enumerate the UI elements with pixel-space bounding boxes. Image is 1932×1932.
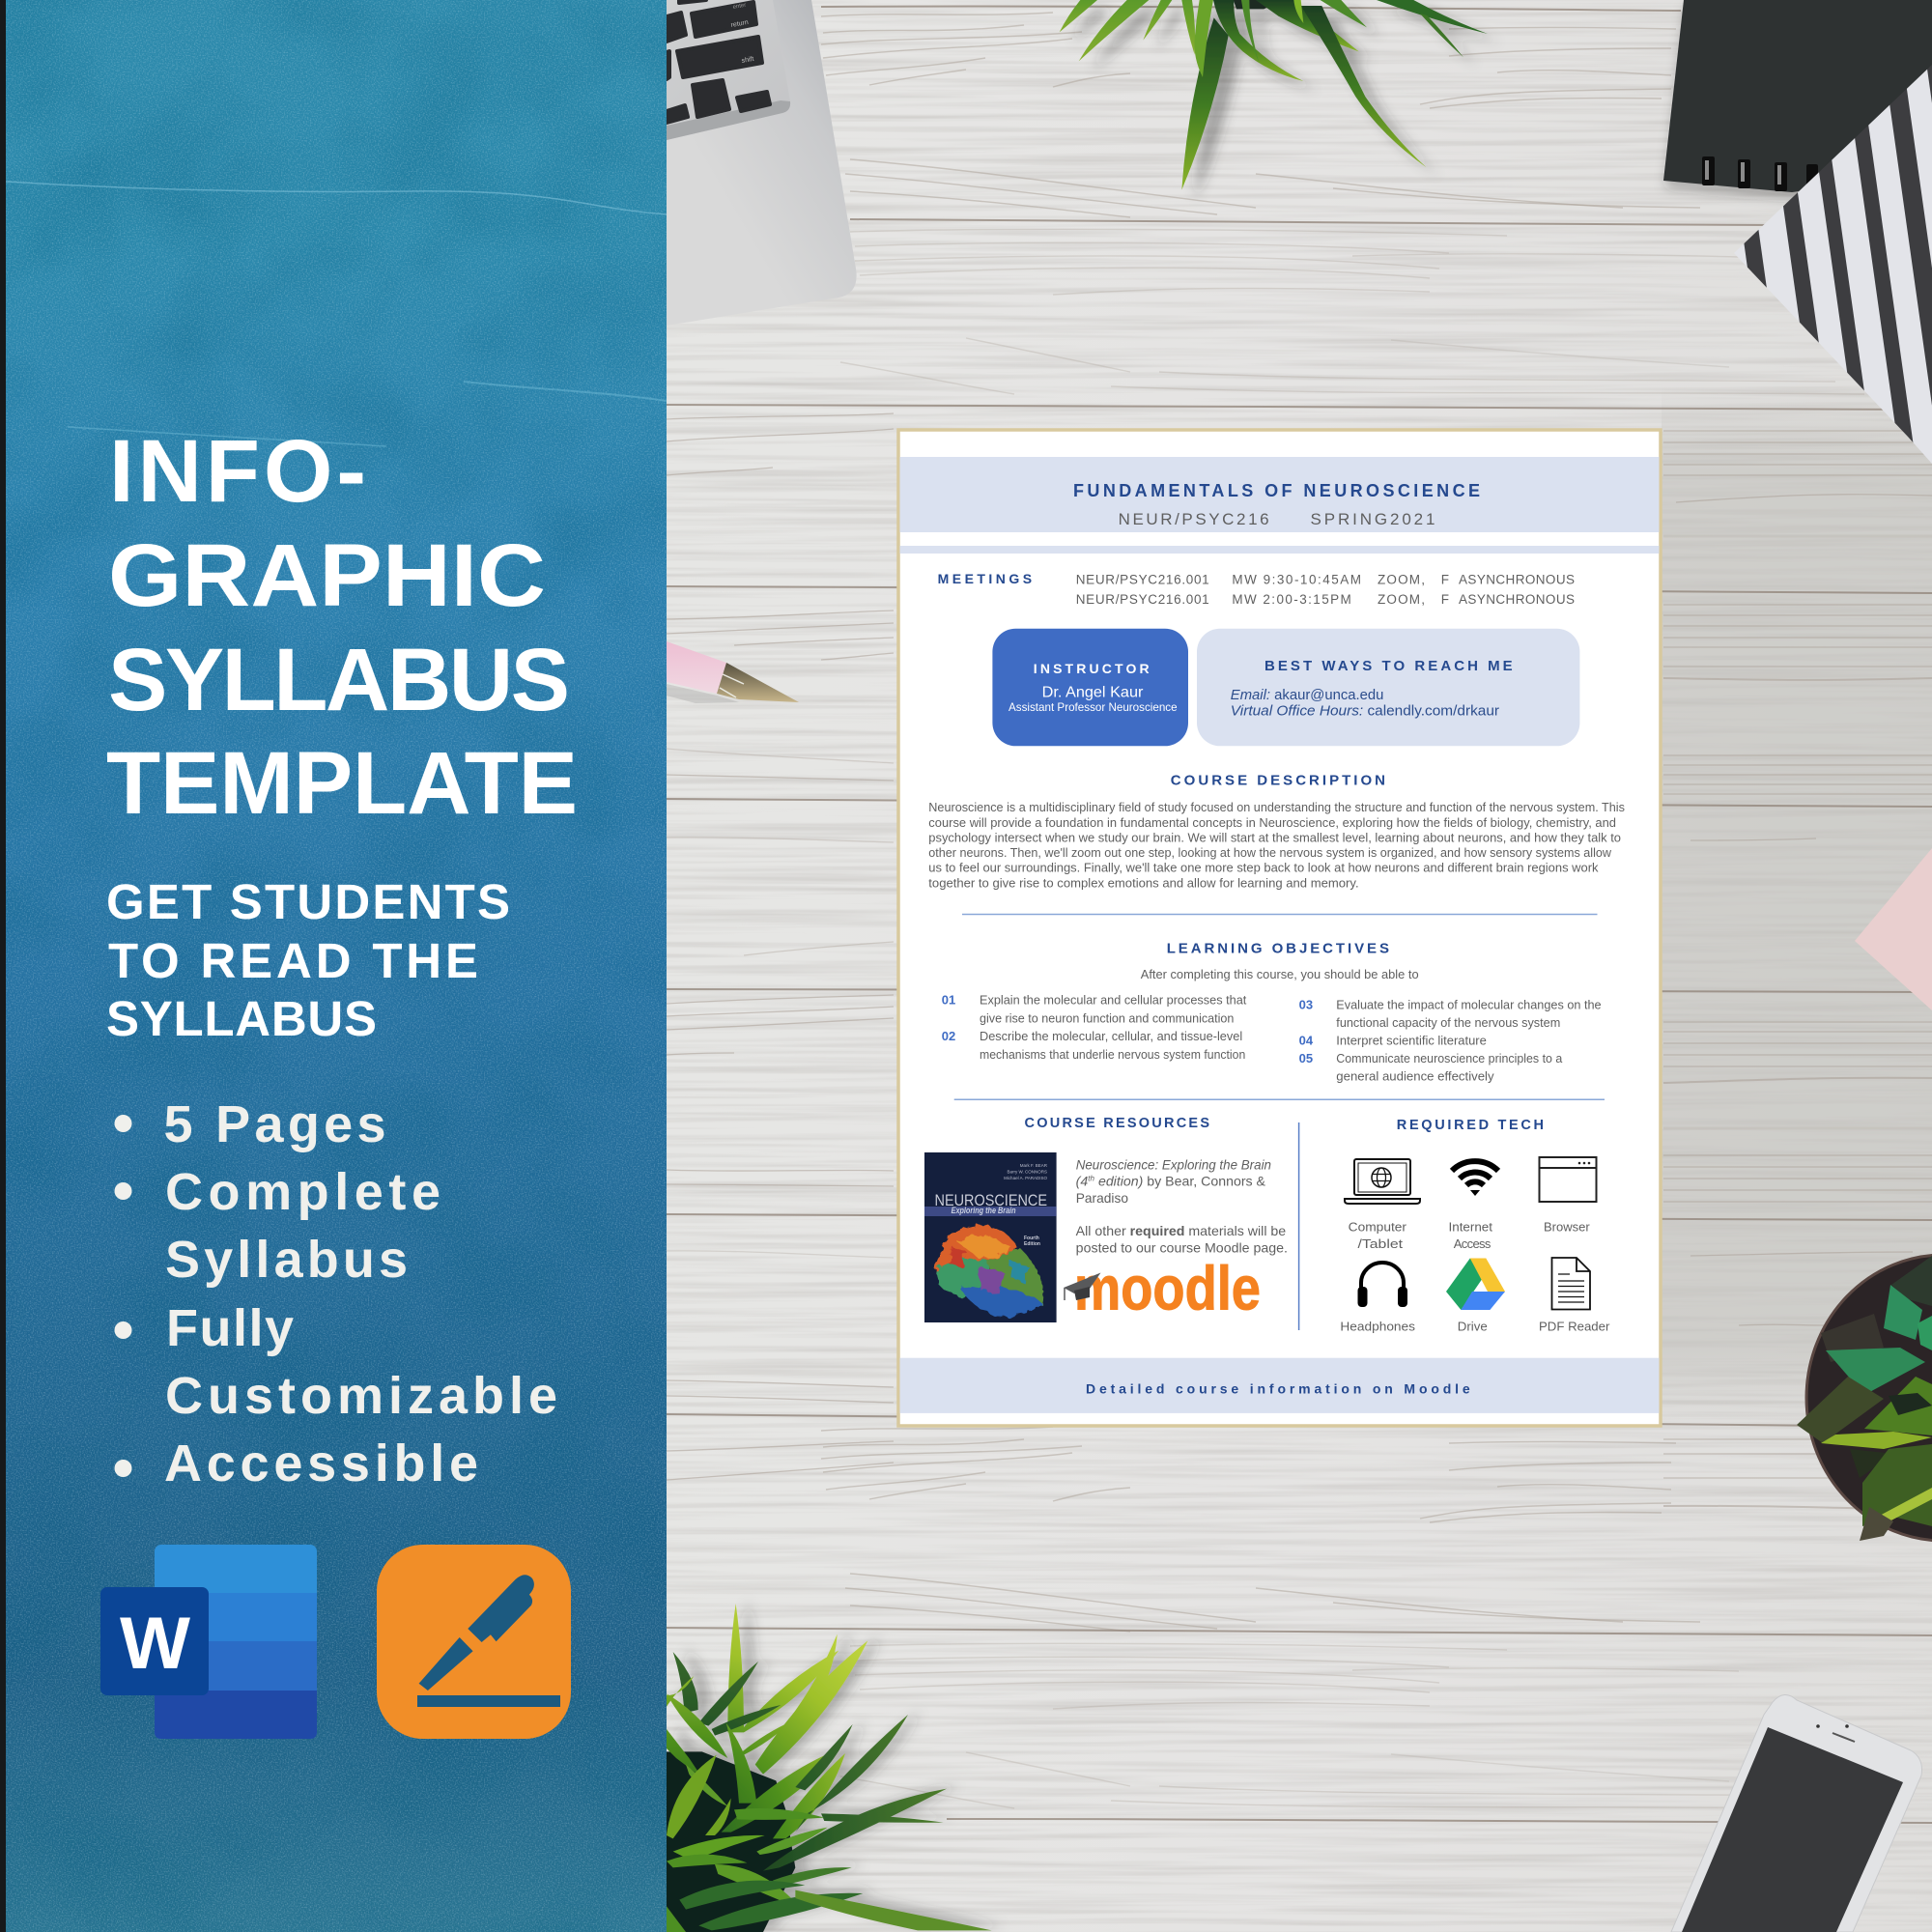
contact card — [1197, 629, 1579, 746]
succulent plant — [1797, 1255, 1932, 1541]
course description: course will provide a foundation in fundamental concepts in Neuroscience, exploring how the fields of biology, chemistry, and — [928, 815, 1616, 830]
feature bullet list: Accessible — [164, 1435, 478, 1492]
meetings: ZOOM, — [1378, 592, 1425, 607]
tech captions: Computer — [1349, 1220, 1407, 1235]
white phone — [1671, 1694, 1922, 1932]
pink pen — [667, 641, 799, 703]
icon: browser window — [1540, 1157, 1596, 1202]
instructor card: Dr. Angel Kaur — [1042, 685, 1144, 701]
tech captions: Access — [1454, 1236, 1492, 1251]
pink paper corner — [1855, 848, 1932, 1010]
course description: other neurons. Then, we'll zoom out one step, looking at how the nervous system is organized, and how sensory systems allow — [928, 845, 1612, 860]
meetings: NEUR/PSYC216.001 — [1076, 592, 1209, 607]
learning objectives: LEARNING OBJECTIVES — [1167, 940, 1389, 956]
course resources — [924, 1116, 1288, 1323]
learning objectives: give rise to neuron function and communication — [980, 1011, 1234, 1026]
footer band — [900, 1358, 1660, 1413]
main title: TEMPLATE — [106, 734, 578, 833]
tech captions: /Tablet — [1358, 1236, 1403, 1251]
textbook description: Paradiso — [1076, 1190, 1128, 1206]
header band: NEUR/PSYC216 — [1119, 510, 1269, 528]
footer band: Detailed course information on Moodle — [1086, 1381, 1470, 1397]
textbook description — [1076, 1156, 1288, 1255]
textbook cover: Exploring the Brain — [952, 1206, 1016, 1216]
left panel — [0, 0, 667, 1932]
learning objectives: 01 — [942, 993, 955, 1008]
learning objectives: 02 — [942, 1029, 955, 1043]
subtitle — [106, 874, 510, 1046]
icon: PDF document — [1551, 1258, 1590, 1310]
background: white wood planks — [667, 0, 1932, 1932]
meetings: ZOOM, — [1378, 573, 1425, 587]
meetings: F — [1441, 573, 1449, 587]
icon: laptop — [1345, 1159, 1420, 1204]
icon: Pages pen — [377, 1545, 571, 1739]
meetings: F — [1441, 592, 1449, 607]
header band: FUNDAMENTALS OF NEUROSCIENCE — [1073, 481, 1480, 500]
tech captions — [1340, 1220, 1610, 1333]
learning objectives: 04 — [1299, 1033, 1314, 1047]
main title: INFO- — [109, 422, 366, 521]
feature bullet list: Complete — [165, 1163, 440, 1221]
tech captions: Browser — [1544, 1220, 1590, 1235]
top plant — [1060, 0, 1488, 190]
meetings: MW 9:30-10:45AM — [1232, 573, 1361, 587]
course description — [928, 773, 1625, 890]
header band: SPRING2021 — [1310, 510, 1435, 528]
learning objectives: Interpret scientific literature — [1336, 1033, 1487, 1047]
learning objectives: 03 — [1299, 997, 1313, 1011]
icon: wifi — [1452, 1161, 1498, 1196]
contact card: Email: akaur@unca.edu — [1231, 688, 1383, 703]
tech captions: PDF Reader — [1539, 1320, 1610, 1333]
textbook description: by Bear, Connors & — [1147, 1173, 1264, 1188]
contact card: Virtual Office Hours: calendly.com/drkaur — [1231, 704, 1499, 720]
main title — [106, 422, 578, 833]
course description: COURSE DESCRIPTION — [1171, 773, 1385, 789]
instructor card: INSTRUCTOR — [1034, 661, 1150, 676]
notebook and striped folder — [1663, 0, 1932, 473]
textbook cover: Fourth — [1024, 1236, 1039, 1241]
instructor card — [992, 629, 1188, 746]
laptop corner: enter — [732, 3, 747, 11]
subtitle: GET STUDENTS — [106, 874, 510, 929]
header band — [900, 457, 1660, 554]
meetings: ASYNCHRONOUS — [1459, 592, 1575, 607]
learning objectives: general audience effectively — [1336, 1069, 1494, 1084]
contact card: BEST WAYS TO REACH ME — [1264, 658, 1513, 674]
notebook — [1663, 0, 1932, 192]
icon: Microsoft Word: W — [120, 1603, 190, 1685]
learning objectives: Communicate neuroscience principles to a — [1336, 1051, 1563, 1065]
icon: Google Drive — [1446, 1258, 1505, 1310]
course description: us to feel our surroundings. Finally, we'll take one more step back to look at how neurons and different brain regions work — [928, 861, 1599, 875]
syllabus document — [898, 430, 1661, 1426]
main title: SYLLABUS — [108, 631, 570, 729]
striped folder — [1735, 66, 1932, 464]
feature bullet list: Fully — [166, 1299, 294, 1357]
laptop corner: return — [730, 19, 749, 29]
feature bullet list: Customizable — [165, 1367, 557, 1425]
textbook description: Neuroscience: Exploring the Brain — [1076, 1156, 1271, 1172]
laptop corner: shift — [741, 56, 754, 65]
learning objectives: Describe the molecular, cellular, and tissue-level — [980, 1029, 1242, 1043]
learning objectives: After completing this course, you should be able to — [1141, 967, 1419, 981]
subtitle: TO READ THE — [108, 933, 478, 988]
feature bullet list: 5 Pages — [164, 1095, 386, 1153]
moodle logo: moodle — [1074, 1254, 1261, 1323]
learning objectives: mechanisms that underlie nervous system function — [980, 1047, 1245, 1062]
textbook description: (4 — [1076, 1173, 1143, 1188]
meetings: MW 2:00-3:15PM — [1232, 592, 1351, 607]
meetings — [938, 571, 1575, 607]
course description: psychology intersect when we study our brain. We will start at the smallest level, learning about neurons, and how they talk to — [928, 831, 1621, 845]
textbook description: posted to our course Moodle page. — [1076, 1239, 1288, 1255]
textbook description: edition) — [1094, 1173, 1143, 1188]
learning objectives — [942, 940, 1602, 1084]
learning objectives: functional capacity of the nervous system — [1336, 1015, 1560, 1030]
textbook cover: Edition — [1024, 1241, 1040, 1247]
textbook cover: Michael A. PARADISO — [1004, 1176, 1047, 1180]
icon: Microsoft Word — [100, 1545, 317, 1739]
required tech — [1340, 1118, 1610, 1333]
subtitle: SYLLABUS — [106, 991, 377, 1046]
tech captions: Headphones — [1340, 1320, 1416, 1333]
textbook cover: Mark F. BEAR — [1020, 1163, 1048, 1168]
feature bullet list: Syllabus — [165, 1231, 408, 1289]
feature bullet list — [114, 1095, 557, 1492]
bottom-left plant — [667, 1604, 992, 1932]
required tech: REQUIRED TECH — [1397, 1118, 1544, 1133]
learning objectives: 05 — [1299, 1051, 1313, 1065]
course description: Neuroscience is a multidisciplinary field of study focused on understanding the structure and function of the nervous system. This — [928, 800, 1625, 814]
textbook cover: Barry W. CONNORS — [1007, 1170, 1047, 1175]
course description: together to give rise to complex emotions and allow for learning and memory. — [928, 875, 1359, 890]
meetings: MEETINGS — [938, 571, 1032, 586]
main title: GRAPHIC — [108, 526, 546, 625]
tech captions: Internet — [1449, 1220, 1492, 1235]
learning objectives: Explain the molecular and cellular processes that — [980, 993, 1247, 1008]
icon: headphones — [1358, 1263, 1407, 1307]
course resources: COURSE RESOURCES — [1024, 1116, 1209, 1131]
textbook cover: NEUROSCIENCE — [935, 1191, 1047, 1209]
instructor card: Assistant Professor Neuroscience — [1009, 700, 1178, 714]
meetings: NEUR/PSYC216.001 — [1076, 573, 1209, 587]
document page — [898, 430, 1661, 1426]
textbook description: All other required materials will be — [1076, 1223, 1286, 1238]
meetings: ASYNCHRONOUS — [1459, 573, 1575, 587]
tech captions: Drive — [1458, 1320, 1488, 1333]
laptop corner — [667, 0, 857, 326]
textbook cover — [924, 1152, 1057, 1322]
textbook description: th — [1088, 1175, 1095, 1182]
learning objectives: Evaluate the impact of molecular changes on the — [1336, 997, 1602, 1011]
